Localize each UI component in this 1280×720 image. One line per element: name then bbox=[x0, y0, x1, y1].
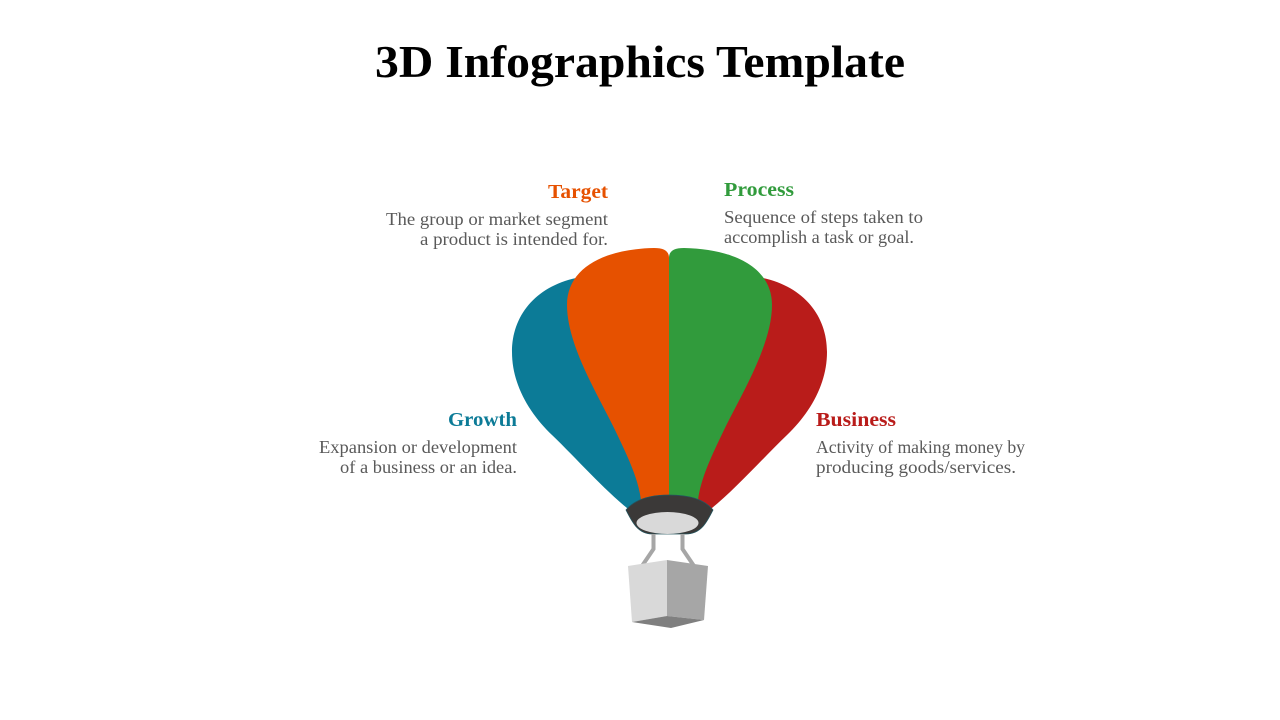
label: process: Sequence of steps taken to bbox=[724, 207, 923, 227]
label: business: producing goods/services. bbox=[816, 457, 1016, 477]
label: target: Target bbox=[548, 181, 608, 203]
balloon burner ring bbox=[626, 495, 713, 534]
label: process: accomplish a task or goal. bbox=[724, 227, 914, 247]
label: business bbox=[816, 409, 1025, 477]
label: growth bbox=[319, 409, 517, 477]
balloon panel: process (green) bbox=[669, 248, 772, 500]
label: process: Process bbox=[724, 179, 794, 201]
label: growth: Expansion or development bbox=[319, 437, 517, 457]
label: growth: of a business or an idea. bbox=[340, 457, 517, 477]
title: 3D Infographics Template bbox=[375, 36, 905, 87]
label: business: Activity of making money by bbox=[816, 437, 1025, 457]
label: process bbox=[724, 179, 923, 247]
label: target bbox=[386, 181, 608, 249]
basket ropes bbox=[642, 534, 694, 566]
balloon panel: business (red) bbox=[694, 278, 827, 512]
label: growth: Growth bbox=[448, 409, 517, 431]
hot air balloon illustration bbox=[512, 248, 827, 628]
basket bbox=[628, 560, 708, 628]
balloon panel: growth (blue) bbox=[512, 278, 645, 512]
label: target: The group or market segment bbox=[386, 209, 608, 229]
label: target: a product is intended for. bbox=[420, 229, 608, 249]
balloon panel: target (orange) bbox=[567, 248, 669, 500]
label: business: Business bbox=[816, 409, 896, 431]
